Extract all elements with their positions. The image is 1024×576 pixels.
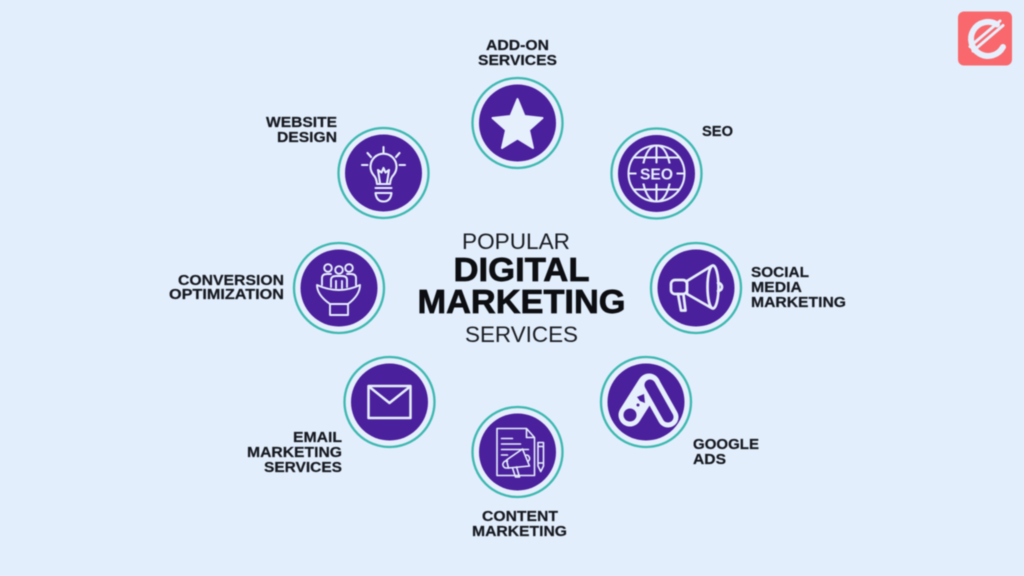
label: website design [266, 115, 337, 146]
service: SEO icon [612, 128, 702, 218]
label: email marketing services [247, 430, 342, 476]
label: content marketing [472, 509, 567, 540]
label: social media marketing: MEDIA [751, 280, 803, 296]
label: add-on services: SERVICES [478, 53, 557, 69]
title [418, 229, 626, 347]
service: conversion optimization icon [294, 243, 384, 333]
label: conversion optimization [169, 273, 284, 303]
service: social media marketing icon [651, 243, 741, 333]
label: SEO: SEO [702, 124, 733, 140]
label: social media marketing: SOCIAL [751, 265, 809, 281]
service: SEO icon: SEO [640, 166, 673, 183]
label: email marketing services: MARKETING [247, 445, 342, 461]
label: website design: DESIGN [277, 130, 337, 146]
label: content marketing: MARKETING [472, 524, 567, 540]
label: add-on services: ADD-ON [486, 38, 549, 54]
service: add-on services icon [472, 78, 562, 168]
title: MARKETING [418, 283, 626, 320]
label: content marketing: CONTENT [482, 509, 558, 525]
logo badge [958, 12, 1012, 66]
title: DIGITAL [454, 251, 590, 288]
title: POPULAR [462, 229, 570, 254]
service: content marketing icon [472, 407, 562, 497]
label: social media marketing [751, 265, 846, 311]
label: email marketing services: EMAIL [293, 430, 342, 446]
label: website design: WEBSITE [266, 115, 337, 131]
title: SERVICES [465, 322, 578, 347]
label: conversion optimization: OPTIMIZATION [169, 287, 284, 303]
label: conversion optimization: CONVERSION [178, 273, 284, 289]
label: google ads: GOOGLE [693, 437, 759, 453]
service: email marketing icon [344, 357, 434, 447]
label: google ads: ADS [693, 452, 726, 468]
label: email marketing services: SERVICES [264, 460, 342, 476]
service: google ads icon [601, 357, 691, 447]
label: social media marketing: MARKETING [751, 295, 846, 311]
service: website design icon [338, 128, 428, 218]
label: google ads [693, 437, 759, 468]
label: add-on services [478, 38, 557, 69]
